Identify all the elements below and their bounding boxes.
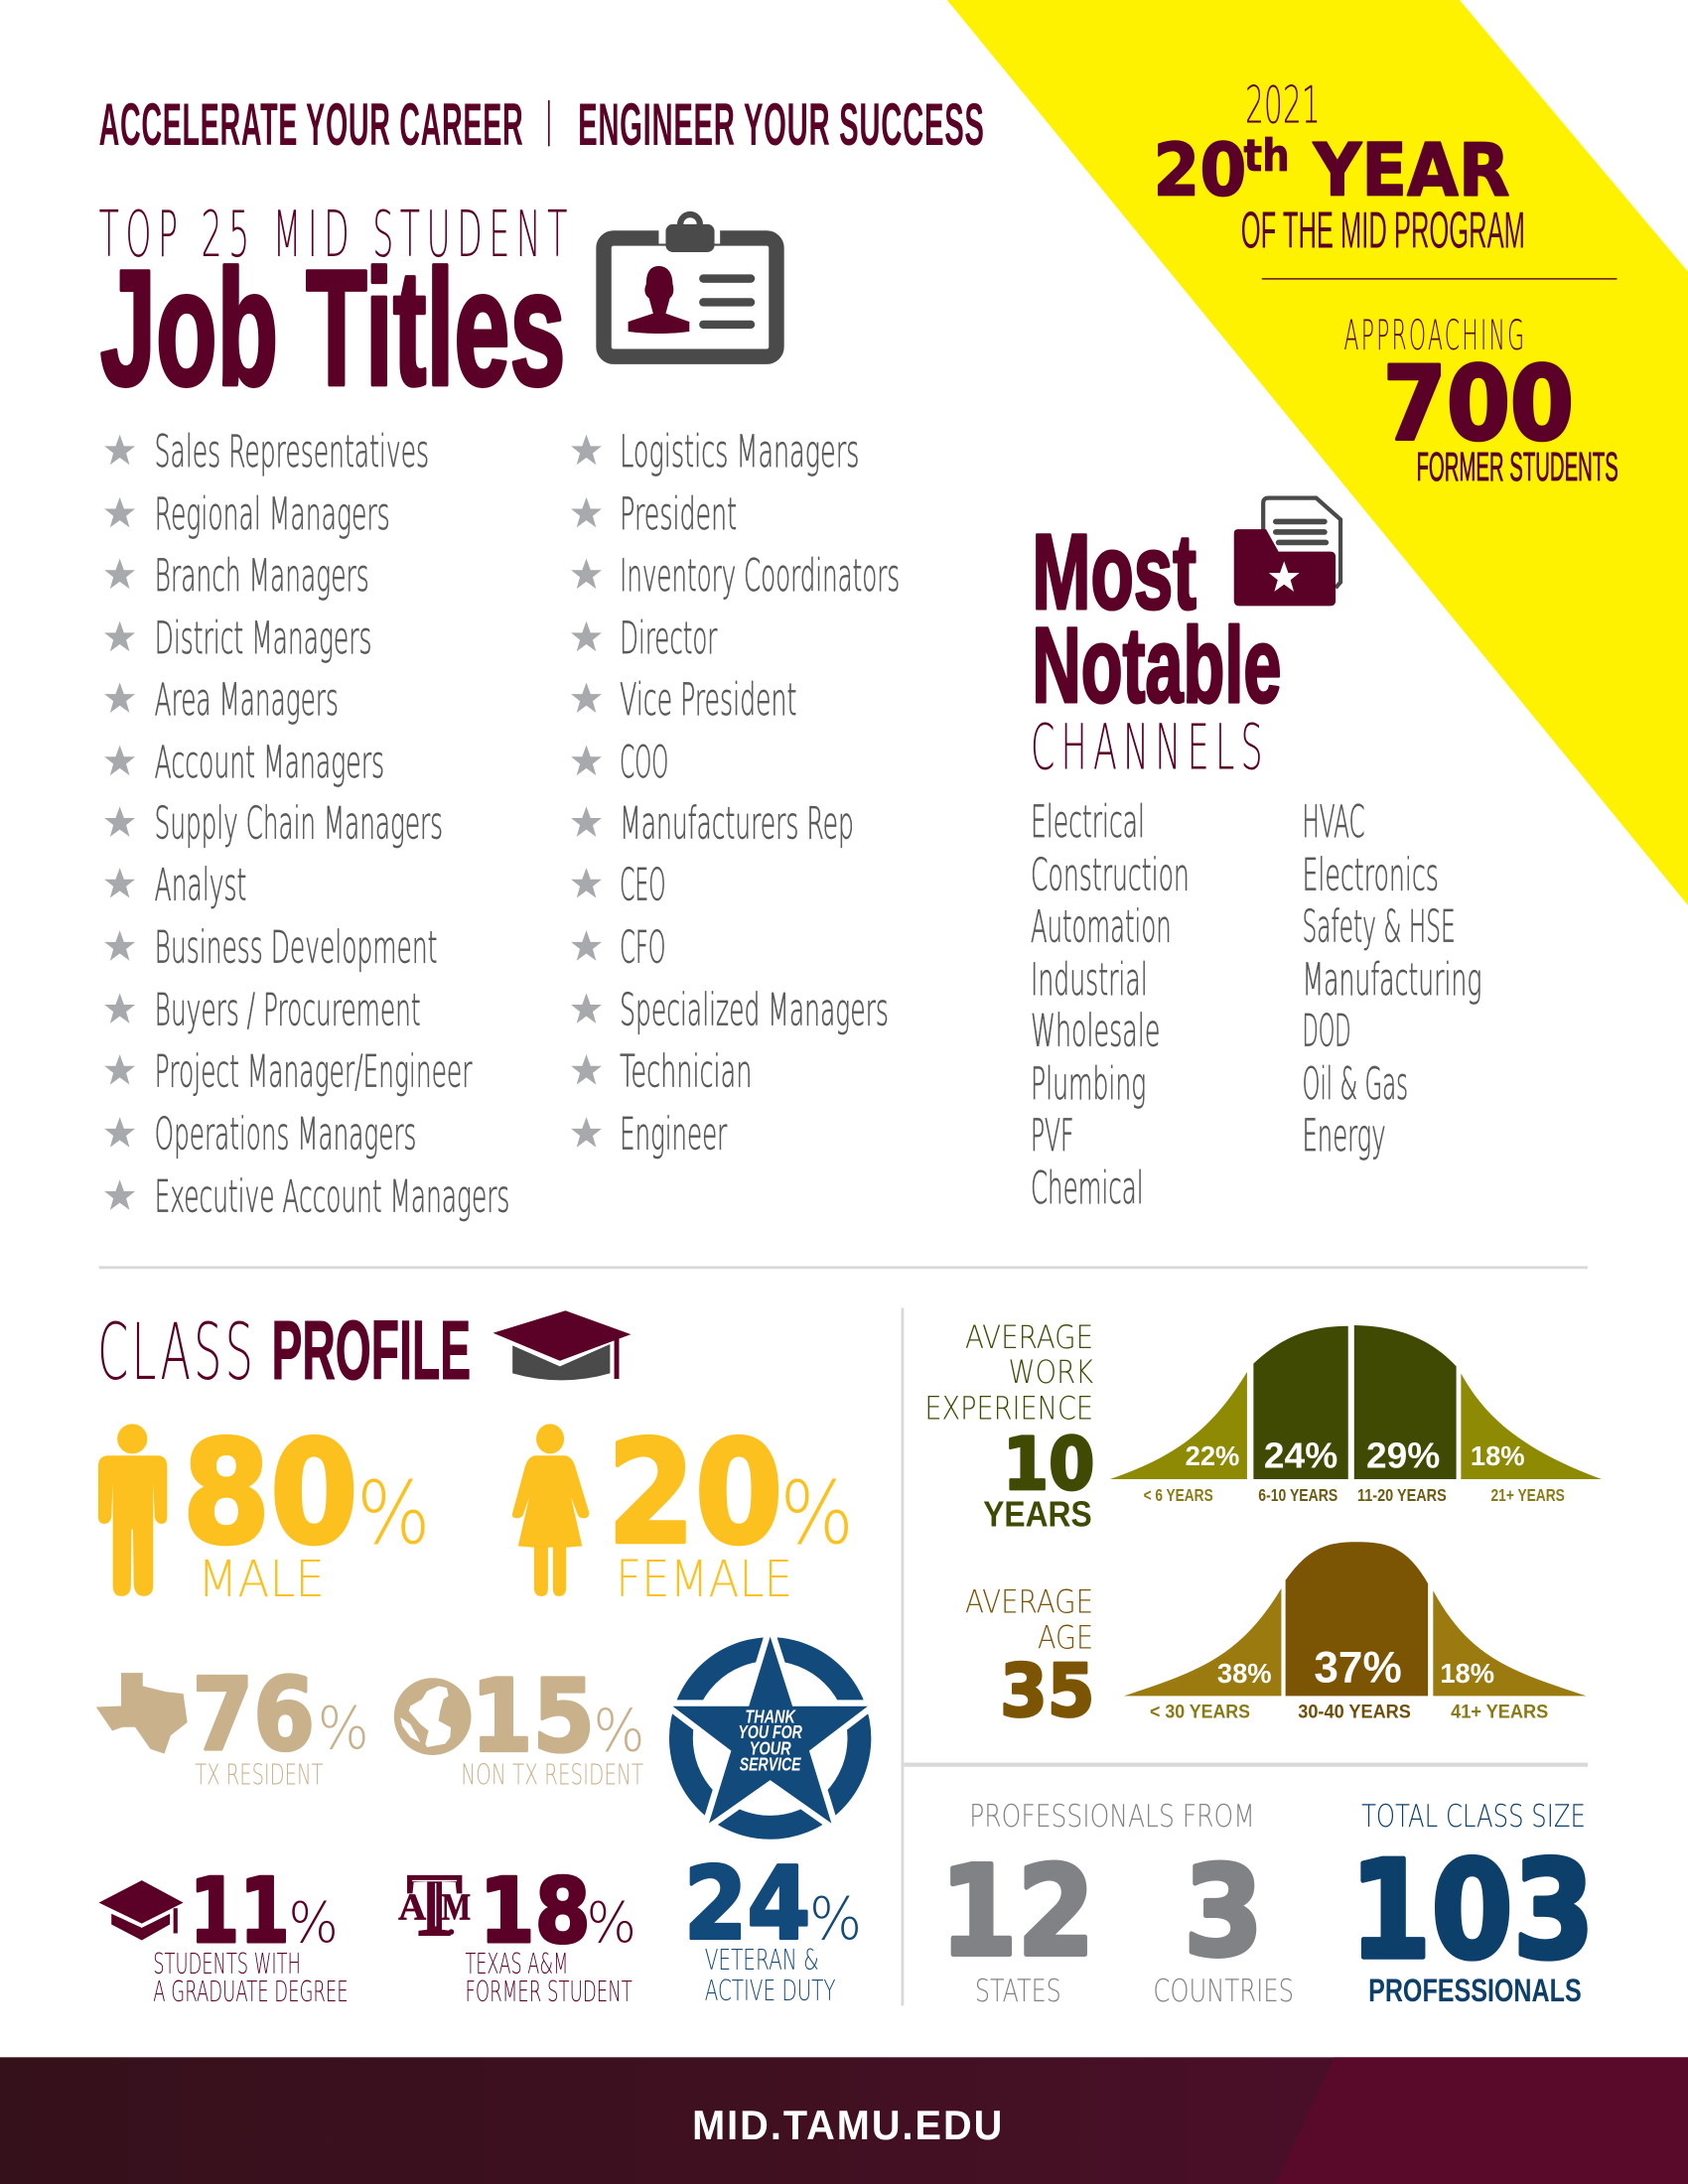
value: 80 (183, 1410, 357, 1575)
value: 24 (684, 1844, 810, 1962)
axis labels: < 30 YEARS (1150, 1702, 1250, 1723)
channels list: column 2: Energy (1302, 1111, 1386, 1161)
stat: 15% non-Texas resident (394, 1658, 644, 1791)
label (965, 1583, 1093, 1657)
value: 76 (193, 1656, 315, 1773)
channels list: column 1: Plumbing (1031, 1059, 1146, 1110)
label: FEMALE (616, 1550, 792, 1608)
chart: age bell curve (1124, 1542, 1587, 1723)
footer band (0, 2057, 1688, 2184)
year: 2021 (1245, 75, 1321, 135)
20th year heading: YEAR (1313, 128, 1509, 212)
states label: STATES (975, 1974, 1061, 2009)
label (153, 1948, 349, 2008)
job title list: column 2: CFO (620, 923, 665, 974)
percent sign: % (288, 1891, 339, 1956)
label: ACTIVE DUTY (705, 1975, 836, 2007)
axis labels: < 6 YEARS (1144, 1485, 1213, 1505)
profile: PROFILE (272, 1303, 471, 1397)
job title list: column 1: Regional Managers (155, 489, 390, 540)
text: ENGINEER YOUR SUCCESS (578, 90, 985, 158)
callout divider (1262, 278, 1617, 280)
icon: folder with document (1234, 498, 1340, 606)
badge text: THANK (745, 1706, 796, 1727)
main heading: Job Titles (100, 236, 565, 420)
channels list: column 1: PVF (1031, 1111, 1073, 1161)
job title list: column 1: District Managers (155, 614, 372, 664)
tagline separator (548, 100, 550, 146)
icon: graduation cap (493, 1310, 631, 1380)
countries value: 3 (1184, 1840, 1263, 1983)
icon: ATM logo: T (407, 1856, 463, 1955)
job title list: column 2: Engineer (620, 1110, 728, 1160)
label: NON TX RESIDENT (461, 1758, 643, 1791)
job title list: column 1: Area Managers (155, 675, 339, 726)
countries label: COUNTRIES (1153, 1974, 1294, 2009)
label: TOTAL CLASS SIZE (1361, 1799, 1586, 1835)
job title list: column 2: Specialized Managers (620, 986, 889, 1036)
segment values: 18% (1471, 1440, 1525, 1471)
channels list: column 2: Oil & Gas (1302, 1059, 1408, 1110)
job title list: column 1: Executive Account Managers (155, 1172, 509, 1223)
channels list: column 1 (1031, 797, 1190, 1214)
icon: ATM logo: M (442, 1886, 471, 1928)
segment values: 29% (1366, 1434, 1440, 1475)
label: A GRADUATE DEGREE (153, 1976, 349, 2008)
job title list: column 2: Logistics Managers (620, 427, 859, 478)
label: PROFESSIONALS FROM (969, 1799, 1255, 1835)
job title list: column 2: Technician (620, 1046, 752, 1097)
channels list: column 1: Automation (1031, 901, 1172, 952)
channels list: column 1: Wholesale (1031, 1007, 1160, 1057)
channels list: column 1: Electrical (1031, 797, 1145, 848)
job title list: column 1: Project Manager/Engineer (155, 1046, 473, 1097)
job title list: column 1: Buyers / Procurement (155, 986, 421, 1036)
channels list: column 2: Manufacturing (1302, 955, 1481, 1006)
job title list: column 2: Manufacturers Rep (620, 799, 854, 850)
label: TEXAS A&M (465, 1948, 568, 1980)
job title list: column 2: Director (620, 614, 718, 664)
label: MALE (198, 1550, 325, 1608)
class: CLASS (97, 1306, 256, 1398)
percent sign: % (779, 1463, 854, 1565)
callout: approaching 700 (1344, 311, 1618, 489)
notable: Notable (1032, 605, 1281, 725)
axis labels: 21+ YEARS (1491, 1485, 1565, 1505)
icon: globe (394, 1678, 472, 1755)
job title list: column 1: Branch Managers (155, 551, 369, 602)
700: 700 (1383, 345, 1574, 464)
label: FORMER STUDENT (465, 1976, 633, 2008)
label: TX RESIDENT (195, 1758, 323, 1791)
channels list: column 2 (1302, 797, 1481, 1161)
job title list: column 2: CEO (620, 860, 665, 910)
heading: most notable channels (1031, 511, 1281, 783)
segment values: 24% (1264, 1434, 1337, 1475)
callout: 20th year (1153, 75, 1525, 259)
job title list: column 2: Vice President (620, 675, 796, 726)
icon: ATM logo: A (398, 1886, 427, 1928)
job title list: column 1: Business Development (155, 923, 437, 974)
stat: 20% female (512, 1410, 854, 1608)
badge text: YOU FOR (738, 1721, 803, 1742)
badge text (738, 1706, 803, 1774)
badge text: YOUR (750, 1737, 791, 1758)
value: 11 (190, 1860, 290, 1964)
heading: top 25 job titles (99, 198, 574, 420)
value: 20 (608, 1410, 782, 1575)
heading: class profile (97, 1303, 471, 1398)
job title list: column 1: Analyst (155, 860, 246, 910)
label (924, 1318, 1093, 1427)
stat: 80% male (98, 1410, 430, 1608)
percent sign: % (809, 1884, 862, 1953)
chart: work experience bell curve (1110, 1325, 1602, 1505)
stat: 76% Texas resident (96, 1656, 369, 1791)
percent sign: % (594, 1697, 644, 1765)
percent sign: % (587, 1891, 636, 1956)
label: VETERAN & (705, 1944, 819, 1977)
icon: female figure (512, 1424, 589, 1596)
channels list: column 2: Safety & HSE (1302, 901, 1456, 952)
segment values: 38% (1217, 1658, 1272, 1689)
stat: 24% veteran (684, 1844, 862, 2007)
20th year heading: 20 (1153, 128, 1246, 212)
job title list: column 2: Inventory Coordinators (620, 551, 900, 602)
stat: professionals from states and countries (940, 1799, 1294, 2009)
channels list: column 2: Electronics (1302, 851, 1439, 901)
job title list: column 1: Supply Chain Managers (155, 799, 443, 850)
axis labels: 41+ YEARS (1451, 1702, 1548, 1723)
axis labels: 11-20 YEARS (1357, 1485, 1447, 1505)
axis labels: 30-40 YEARS (1298, 1702, 1411, 1723)
average age (965, 1583, 1094, 1734)
most: Most (1032, 511, 1196, 631)
stat: 18% Texas A&M (398, 1856, 636, 2008)
percent sign: % (318, 1694, 369, 1762)
20th year heading (1153, 128, 1509, 212)
segment values (1217, 1641, 1494, 1692)
segment values (1186, 1434, 1525, 1475)
unit: YEARS (983, 1494, 1092, 1535)
value: 10 (1003, 1423, 1094, 1507)
value: 15 (471, 1658, 595, 1775)
20th year heading: th (1244, 129, 1290, 182)
channels list: column 1: Industrial (1031, 955, 1148, 1006)
icon: veteran star badge (672, 1637, 868, 1828)
job title list: column 2: COO (620, 738, 668, 788)
states value: 12 (940, 1840, 1094, 1983)
label: WORK (1009, 1353, 1093, 1391)
segment values: 18% (1440, 1658, 1494, 1689)
channels list: column 1: Chemical (1031, 1163, 1144, 1214)
icon: ID badge (604, 214, 776, 356)
icon: mortarboard (99, 1880, 184, 1940)
stat: total class size (1349, 1799, 1595, 2008)
icon: male figure (98, 1424, 167, 1596)
percent sign: % (356, 1463, 430, 1565)
job title list: column 1: Account Managers (155, 738, 384, 788)
axis labels: 6-10 YEARS (1258, 1485, 1337, 1505)
yellow diagonal band (947, 0, 1688, 905)
channels list: column 1: Construction (1031, 851, 1190, 901)
label (705, 1944, 836, 2007)
label: STUDENTS WITH (153, 1948, 301, 1980)
icon: Texas (96, 1673, 188, 1753)
segment values: 37% (1314, 1641, 1402, 1692)
axis labels (1144, 1485, 1565, 1505)
label: AVERAGE (965, 1318, 1093, 1356)
value: 35 (1000, 1650, 1094, 1734)
job title list: column 1: Sales Representatives (155, 427, 429, 478)
label: EXPERIENCE (924, 1389, 1093, 1427)
channels list: column 2: HVAC (1302, 797, 1365, 848)
label (465, 1948, 633, 2008)
footer URL: MID.TAMU.EDU (692, 2102, 1004, 2148)
value: 103 (1349, 1833, 1595, 1989)
badge text: SERVICE (740, 1753, 801, 1774)
segment values: 22% (1186, 1440, 1239, 1471)
job title list: column 1: Operations Managers (155, 1110, 416, 1160)
channels: CHANNELS (1031, 710, 1269, 783)
unit: PROFESSIONALS (1368, 1973, 1582, 2008)
job title list: column 2 (571, 427, 900, 1160)
job title list: column 1 (104, 427, 509, 1223)
value: 18 (480, 1860, 591, 1964)
header tagline: ACCELERATE YOUR CAREER (99, 90, 523, 158)
channels list: column 2: DOD (1302, 1007, 1351, 1057)
subheading: TOP 25 MID STUDENT (99, 198, 574, 272)
stat: 11% graduate degree (99, 1860, 349, 2008)
label: AGE (1038, 1619, 1093, 1657)
job title list: column 2: President (620, 489, 737, 540)
average work experience (924, 1318, 1094, 1535)
axis labels (1150, 1702, 1548, 1723)
label: AVERAGE (965, 1583, 1093, 1621)
approaching: APPROACHING (1344, 311, 1526, 359)
